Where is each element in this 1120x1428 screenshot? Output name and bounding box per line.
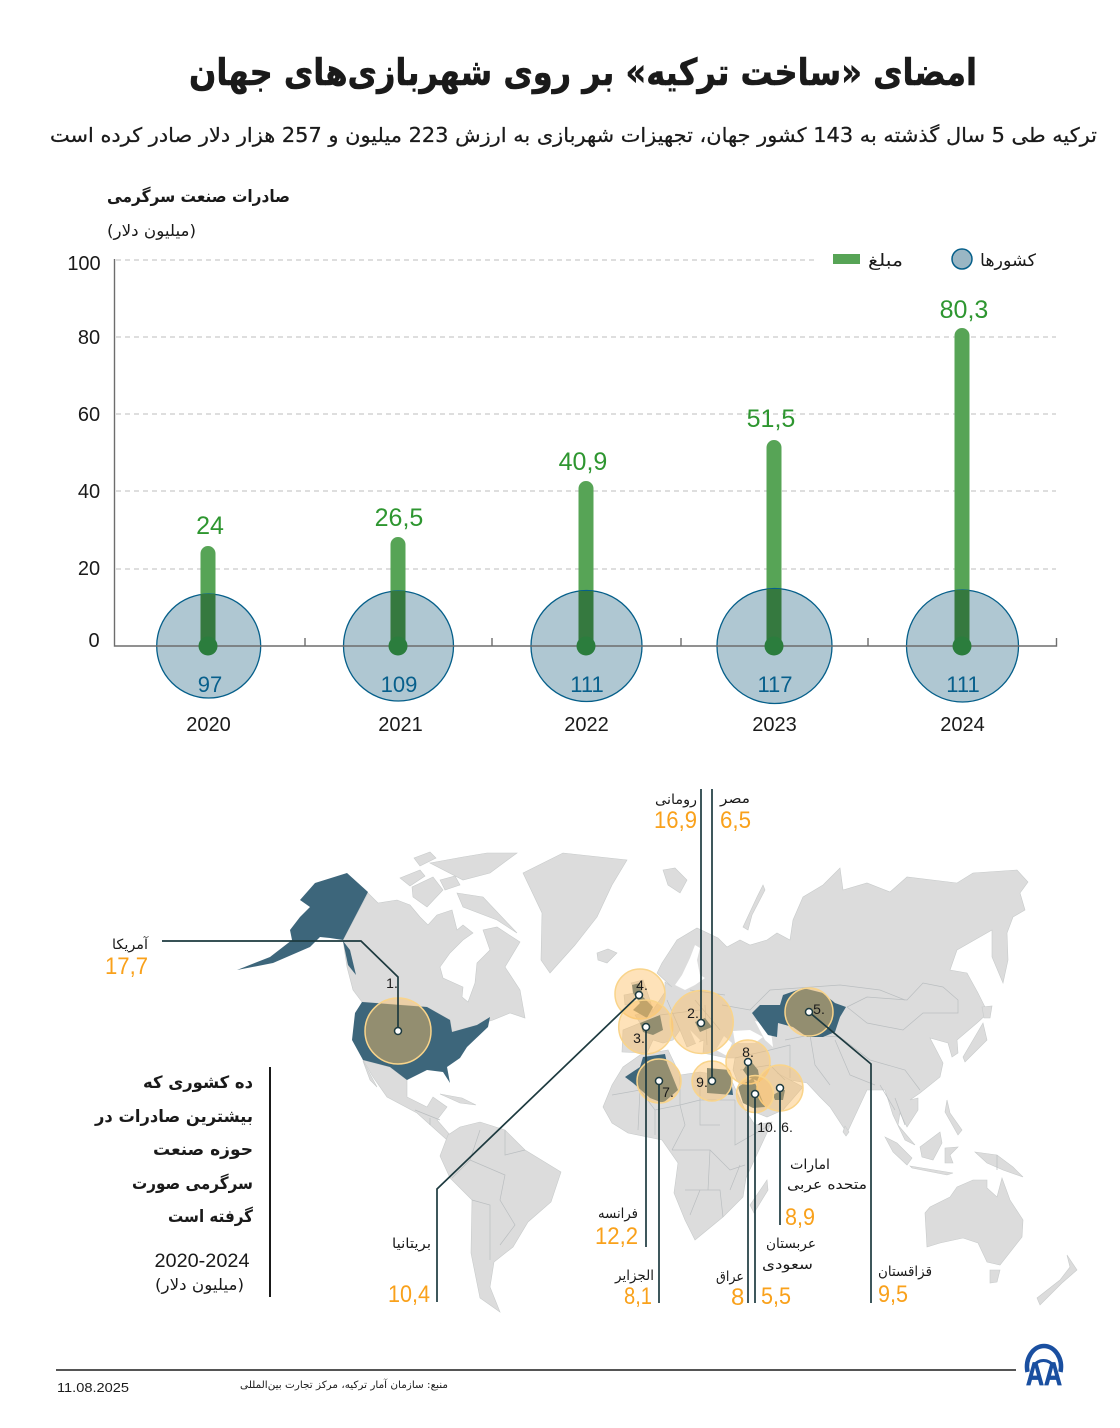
country counts: 117 <box>757 672 793 697</box>
country label: Romania: 16,9 <box>654 807 697 834</box>
country label: UAE: متحده عربی <box>787 1177 867 1193</box>
y axis labels <box>67 253 101 652</box>
world map <box>105 789 1077 1312</box>
country borders <box>415 983 997 1260</box>
country label: Kazakhstan <box>878 1264 932 1308</box>
country label: Saudi Arabia: سعودی <box>762 1257 813 1273</box>
year labels: 2024 <box>940 714 985 736</box>
country circles <box>157 588 1018 704</box>
map side note <box>94 1067 271 1297</box>
country label: Kazakhstan: 9,5 <box>878 1281 908 1308</box>
logo: AA: AA <box>1026 1356 1062 1392</box>
value bubbles <box>365 969 833 1112</box>
country label: Algeria <box>614 1268 654 1310</box>
map side note: 2020-2024 <box>154 1251 250 1272</box>
rank numbers: 2. <box>687 1005 699 1021</box>
country label: USA <box>105 936 149 980</box>
y axis labels: 0 <box>88 630 100 652</box>
rank numbers: 3. <box>633 1030 645 1046</box>
rank numbers: 6. <box>781 1119 793 1135</box>
map side note: سرگرمی صورت <box>132 1173 253 1194</box>
rank numbers: 10. <box>757 1119 777 1135</box>
year labels: 2020 <box>186 714 231 736</box>
country counts <box>198 672 980 697</box>
legend: مبلغ <box>868 251 903 271</box>
country counts: 111 <box>570 672 604 697</box>
country label: USA: 17,7 <box>105 953 148 980</box>
leader dots <box>394 992 812 1098</box>
y axis labels: 40 <box>78 481 100 503</box>
amount values: 24 <box>196 512 224 540</box>
rank numbers: 9. <box>696 1074 708 1090</box>
inland seas <box>675 945 773 1056</box>
country label: France <box>595 1206 638 1250</box>
rank numbers: 5. <box>813 1001 825 1017</box>
country label: France: فرانسه <box>598 1206 638 1222</box>
map side note: (میلیون دلار) <box>155 1275 244 1295</box>
country label: Algeria: الجزایر <box>614 1268 654 1284</box>
map side note: ده کشوری که <box>143 1073 253 1093</box>
amount values: 80,3 <box>940 296 988 324</box>
country label: Egypt <box>719 791 751 834</box>
map side note: گرفته است <box>168 1206 253 1227</box>
legend <box>833 249 1037 271</box>
y axis labels: 20 <box>78 558 100 580</box>
country label: Iraq: عراق <box>716 1269 744 1285</box>
rank numbers: 1. <box>386 975 398 991</box>
map side note: بیشترین صادرات در <box>94 1107 253 1127</box>
country label: UAE: 8,9 <box>785 1204 815 1231</box>
country counts: 109 <box>381 672 417 697</box>
amount values <box>196 296 988 540</box>
amount values: 40,9 <box>559 448 607 476</box>
year labels: 2023 <box>752 714 797 736</box>
country label: Britain: بریتانیا <box>392 1236 431 1252</box>
country label: Saudi Arabia: عربستان <box>766 1236 816 1252</box>
year labels <box>186 714 985 736</box>
country label: Algeria: 8,1 <box>624 1283 652 1310</box>
country label: Kazakhstan: قزاقستان <box>878 1264 932 1280</box>
footer rule <box>56 1369 1016 1371</box>
date: 11.08.2025 <box>57 1380 129 1395</box>
country counts: 111 <box>946 672 980 697</box>
country label: Romania <box>654 792 697 834</box>
country label: Britain: 10,4 <box>388 1281 430 1308</box>
y axis labels: 60 <box>78 404 100 426</box>
rank numbers <box>386 975 825 1135</box>
chart heading: صادرات صنعت سرگرمی <box>107 186 290 207</box>
leader lines <box>162 789 871 1303</box>
country label: Iraq: 8 <box>731 1284 744 1311</box>
amount values: 51,5 <box>747 405 795 433</box>
year labels: 2022 <box>564 714 609 736</box>
bar segments over circles <box>200 589 970 646</box>
map land <box>343 852 1077 1312</box>
subtitle: ترکیه طی 5 سال گذشته به 143 کشور جهان، تجهیزات شهربازی به ارزش 223 میلیون و 257 هزار دلار صادر کرده است <box>50 123 1097 147</box>
country label: Egypt: مصر <box>719 791 750 807</box>
bar chart <box>67 253 1056 736</box>
amount values: 26,5 <box>375 504 423 532</box>
country label: Iraq <box>716 1269 744 1311</box>
y axis labels: 100 <box>67 253 101 275</box>
rank numbers: 8. <box>742 1044 754 1060</box>
source: منبع: سازمان آمار ترکیه، مرکز تجارت بین‌المللی <box>240 1378 448 1391</box>
bars <box>200 328 970 646</box>
logo: AA <box>1026 1346 1062 1392</box>
country label: Saudi Arabia: 5,5 <box>761 1283 791 1310</box>
map side note: حوزه صنعت <box>153 1140 253 1160</box>
rank numbers: 4. <box>636 977 648 993</box>
bar base dots <box>198 636 972 656</box>
highlighted countries <box>237 873 846 1108</box>
country label: Romania: رومانی <box>655 792 697 808</box>
country label: USA: آمریکا <box>112 936 149 953</box>
title: امضای «ساخت ترکیه» بر روی شهربازی‌های جهان <box>189 51 977 94</box>
country label: France: 12,2 <box>595 1223 638 1250</box>
country label: Britain <box>388 1236 431 1308</box>
legend: کشورها <box>980 251 1037 271</box>
country label: Saudi Arabia <box>761 1236 816 1310</box>
country label: UAE: امارات <box>790 1157 830 1173</box>
rank numbers: 7. <box>662 1084 674 1100</box>
country label: UAE <box>785 1157 867 1231</box>
y axis labels: 80 <box>78 327 100 349</box>
chart unit: (میلیون دلار) <box>107 221 196 241</box>
country label: Egypt: 6,5 <box>720 807 751 834</box>
year labels: 2021 <box>378 714 423 736</box>
country counts: 97 <box>198 672 222 697</box>
